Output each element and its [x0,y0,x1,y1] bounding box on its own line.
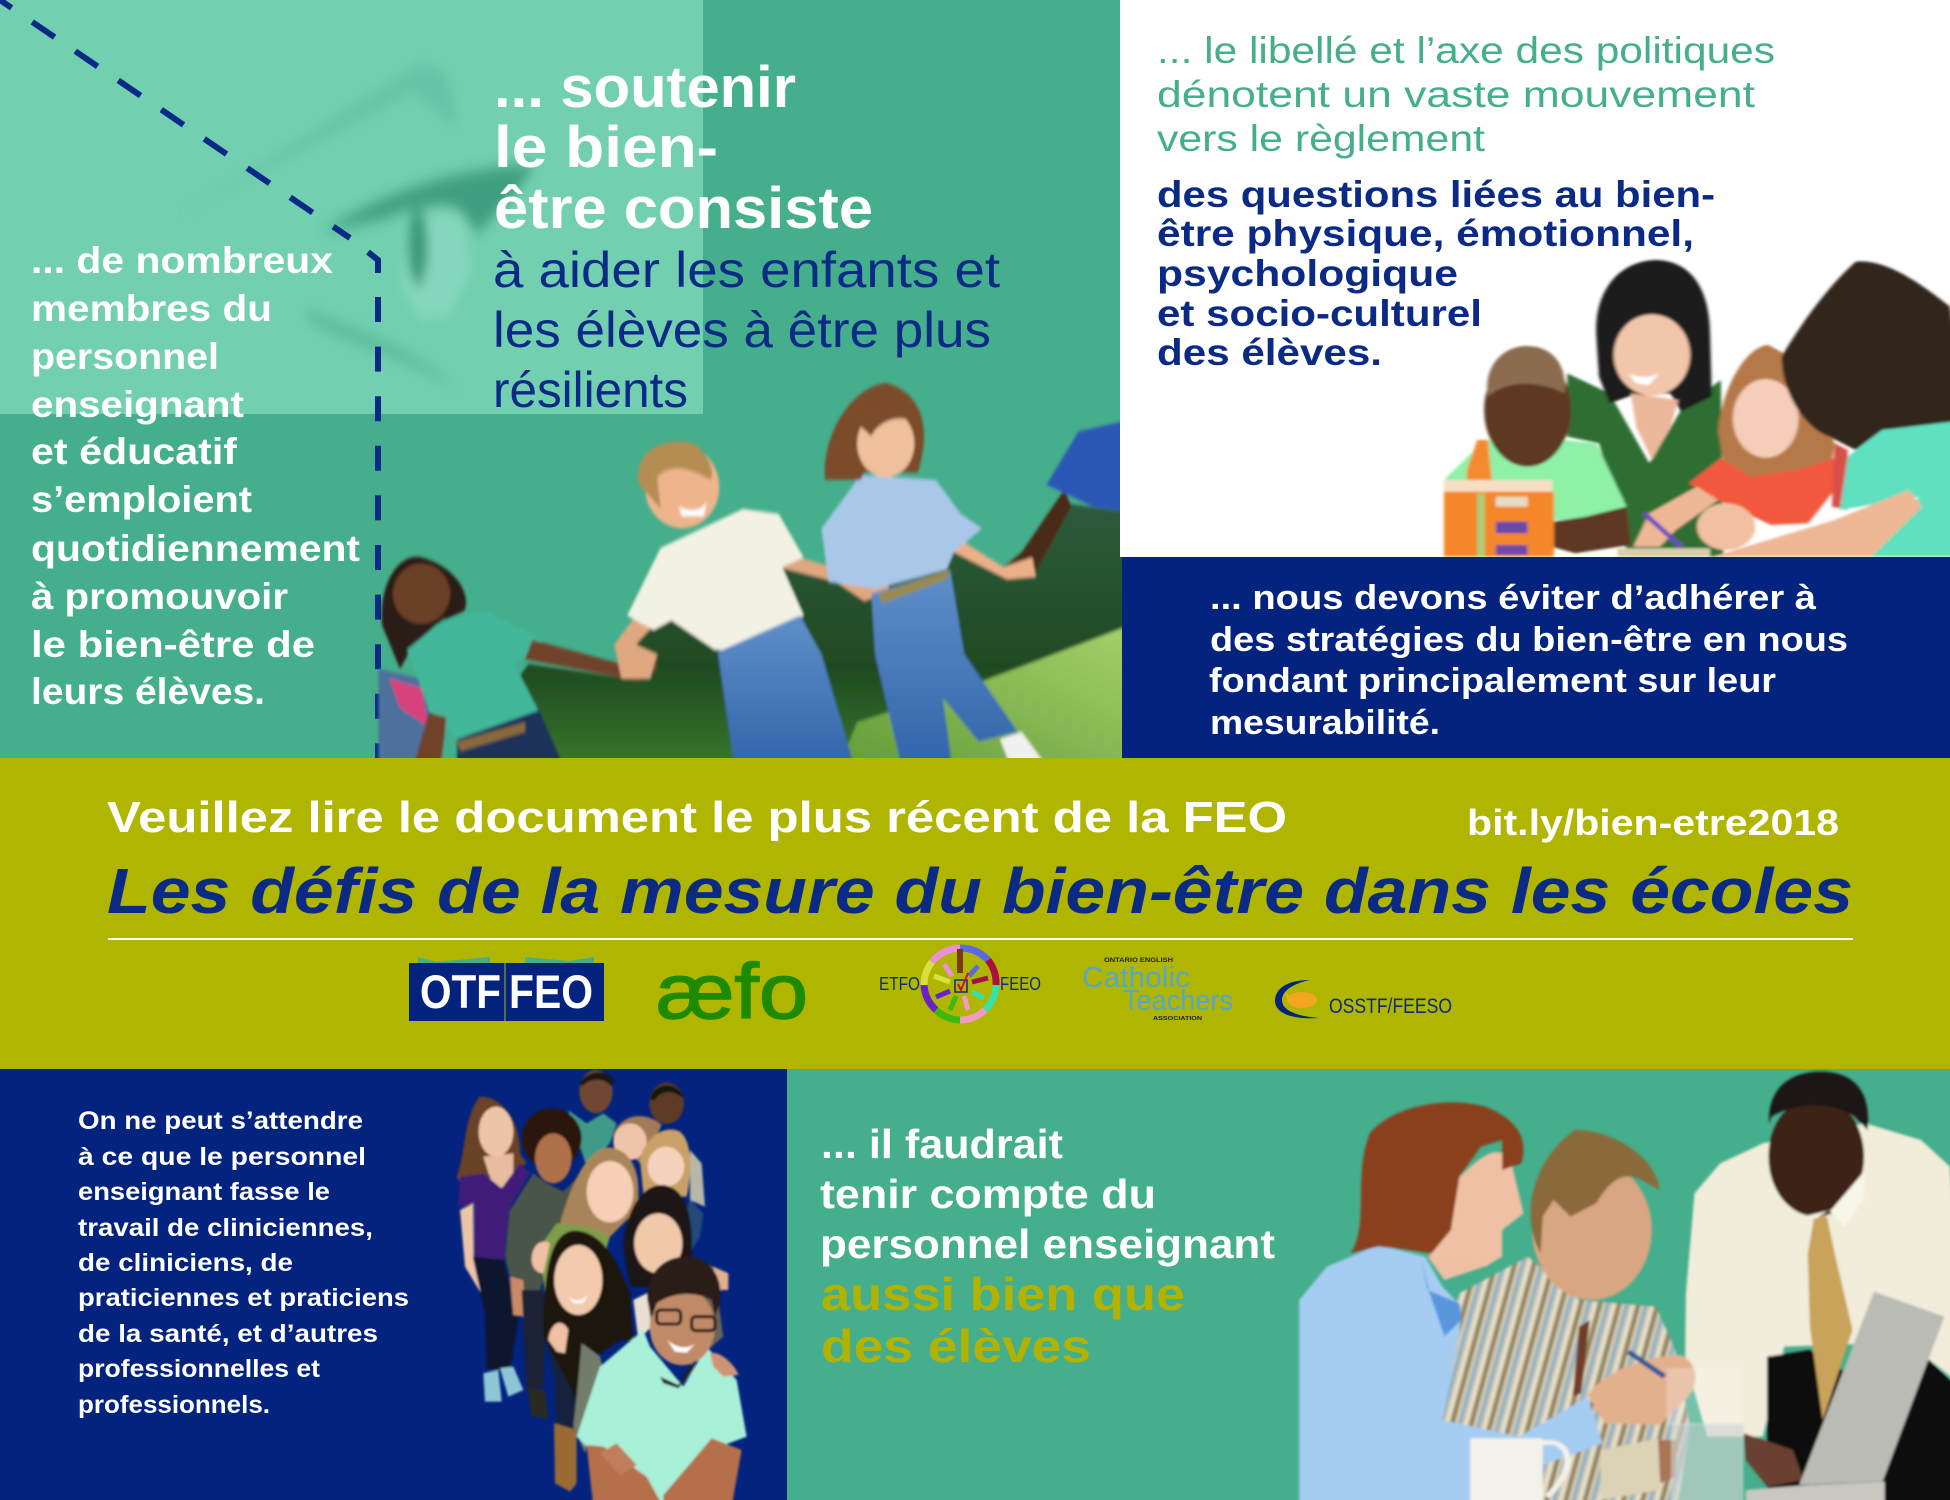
laptop [1746,1292,1944,1500]
logo: ETFO FEEO: ETFO [879,974,920,994]
logo: Catholic Teachers [1082,958,1233,1022]
text block: questions liées au bien-être [1157,174,1715,373]
basket [1444,440,1554,557]
text block: on ne peut s'attendre [78,1107,409,1419]
front boy in mint polo [577,1256,747,1500]
text block: on ne peut s'attendre: à ce que le personnel [78,1143,366,1171]
photo: colleagues around a laptop [1299,1072,1950,1500]
text block: nous devons éviter: ... nous devons éviter d’adhérer à [1210,579,1816,617]
text block: on ne peut s'attendre: On ne peut s’attendre [78,1107,363,1135]
heading: soutenir le bien-être: ... soutenir [494,55,796,120]
heading: soutenir le bien-être [494,55,873,241]
text block: de nombreux membres du personnel: s’emploient [31,479,252,520]
text block: nous devons éviter: mesurabilité. [1210,704,1440,742]
text block: de nombreux membres du personnel: quotidiennement [31,528,360,569]
curly haired girl [457,1097,530,1402]
text block: de nombreux membres du personnel: et éducatif [31,431,238,472]
text block: questions liées au bien-être: des élèves. [1157,332,1382,373]
text block: de nombreux membres du personnel: leurs élèves. [31,671,265,712]
text block: de nombreux membres du personnel [31,240,360,712]
logo: Catholic Teachers: Teachers [1123,985,1233,1017]
panel: libellé et axe des politiques (white) [1120,0,1950,557]
logo: OTF FEO [409,957,604,1021]
icon: faint eye image [179,63,536,388]
teacher [1567,260,1723,557]
text block: questions liées au bien-être: des questions liées au bien- [1157,174,1715,215]
panel: soutenir le bien-être (teal) [0,0,1120,760]
panel: call to read FEO document (olive band) [0,758,1950,1069]
logo: ETFO FEEO [879,948,1041,1020]
child on right [1697,261,1950,557]
text block: nous devons éviter: des stratégies du bien-être en nous [1210,621,1848,659]
logo: Catholic Teachers: ONTARIO ENGLISH [1104,958,1173,964]
man in striped shirt [1440,1130,1690,1500]
logo: Catholic Teachers: Catholic [1082,962,1190,994]
table [1618,548,1710,557]
text block: de nombreux membres du personnel: le bien-être de [31,624,315,665]
logo: ETFO FEEO: FEEO [1000,974,1041,994]
photo: teacher with children [1444,260,1950,557]
girl in blue shirt [821,383,1054,776]
text block: questions liées au bien-être: psychologique [1157,253,1458,294]
right child [1004,417,1143,577]
text block: aussi bien que des élèves: des élèves [821,1320,1091,1372]
boy [1446,346,1631,557]
text block: aussi bien que des élèves: aussi bien que [821,1268,1185,1320]
logo: Catholic Teachers: ASSOCIATION [1153,1016,1203,1022]
text block: questions liées au bien-être: et socio-culturel [1157,293,1482,334]
afro girl [505,1108,582,1418]
text block: de nombreux membres du personnel: enseignant [31,384,244,425]
text block: de nombreux membres du personnel: personnel [31,336,219,377]
glass and mug [1470,1368,1744,1500]
dashed vertical line [368,252,378,760]
girl on left [379,557,657,776]
text block: on ne peut s'attendre: professionnels. [78,1391,270,1419]
text block: nous devons éviter: fondant principalement sur leur [1209,662,1776,700]
man in white shirt [1685,1072,1950,1500]
text block: à aider les enfants: résilients [493,362,688,418]
text block: à aider les enfants: les élèves à être plus [493,302,991,358]
long haired girl [543,1231,633,1492]
back boys [568,1070,705,1207]
text block: le libellé: vers le règlement [1157,118,1486,159]
boy in white t-shirt [614,442,889,776]
text block: il faudrait: ... il faudrait [821,1121,1063,1167]
logo: OSSTF FEESO [1275,980,1452,1018]
logo: OSSTF FEESO: OSSTF/FEESO [1329,995,1452,1018]
text block: le libellé: dénotent un vaste mouvement [1157,74,1756,115]
logo: aefo: æfo [656,947,808,1035]
text block: il faudrait: tenir compte du [820,1171,1156,1217]
text block: nous devons éviter [1209,579,1848,742]
dark haired girl with arms [623,1185,728,1348]
dashed diagonal line [0,0,350,238]
blonde girls [532,1129,703,1310]
text block: de nombreux membres du personnel: membres du [31,288,272,329]
panel: attentes envers le personnel (navy) [0,1069,787,1500]
logo: OTF FEO: OTF [420,965,501,1018]
text block: il faudrait [820,1121,1275,1267]
text block: le libellé [1157,30,1775,159]
photo: group of students [457,1070,747,1500]
text block: questions liées au bien-être: être physique, émotionnel, [1157,213,1694,254]
text block: de nombreux membres du personnel: à promouvoir [31,576,288,617]
text block: on ne peut s'attendre: de la santé, et d’autres [78,1320,378,1348]
text block: on ne peut s'attendre: travail de cliniciennes, [78,1214,373,1242]
heading: soutenir le bien-être: le bien- [494,115,718,180]
text block: il faudrait: personnel enseignant [820,1221,1275,1267]
text block: on ne peut s'attendre: praticiennes et praticiens [78,1284,409,1312]
document title: Les défis de la mesure du bien-être dans les écoles [107,855,1853,927]
girl in red [1633,345,1835,547]
heading: soutenir le bien-être: être consiste [494,176,873,241]
text block: de nombreux membres du personnel: ... de nombreux [31,240,333,281]
panel: éviter les stratégies (navy) [1122,557,1950,758]
call to action heading: Veuillez lire le document le plus récent de la FEO [107,793,1287,842]
text block: on ne peut s'attendre: enseignant fasse le [78,1178,330,1206]
text block: le libellé: ... le libellé et l’axe des politiques [1157,30,1775,71]
text block: on ne peut s'attendre: professionnelles et [78,1355,321,1383]
panel: tenir compte du personnel (teal) [787,1069,1950,1500]
text block: à aider les enfants [493,242,1000,418]
text block: aussi bien que des élèves [821,1268,1185,1372]
text block: on ne peut s'attendre: de cliniciens, de [78,1249,293,1277]
link: bit.ly/bien-etre2018 [1467,802,1839,843]
light teal eye panel [0,0,703,414]
woman in blue shirt [1299,1102,1696,1500]
text block: à aider les enfants: à aider les enfants et [493,242,1000,298]
photo: children running [379,383,1143,776]
logo: OTF FEO: FEO [509,965,593,1018]
